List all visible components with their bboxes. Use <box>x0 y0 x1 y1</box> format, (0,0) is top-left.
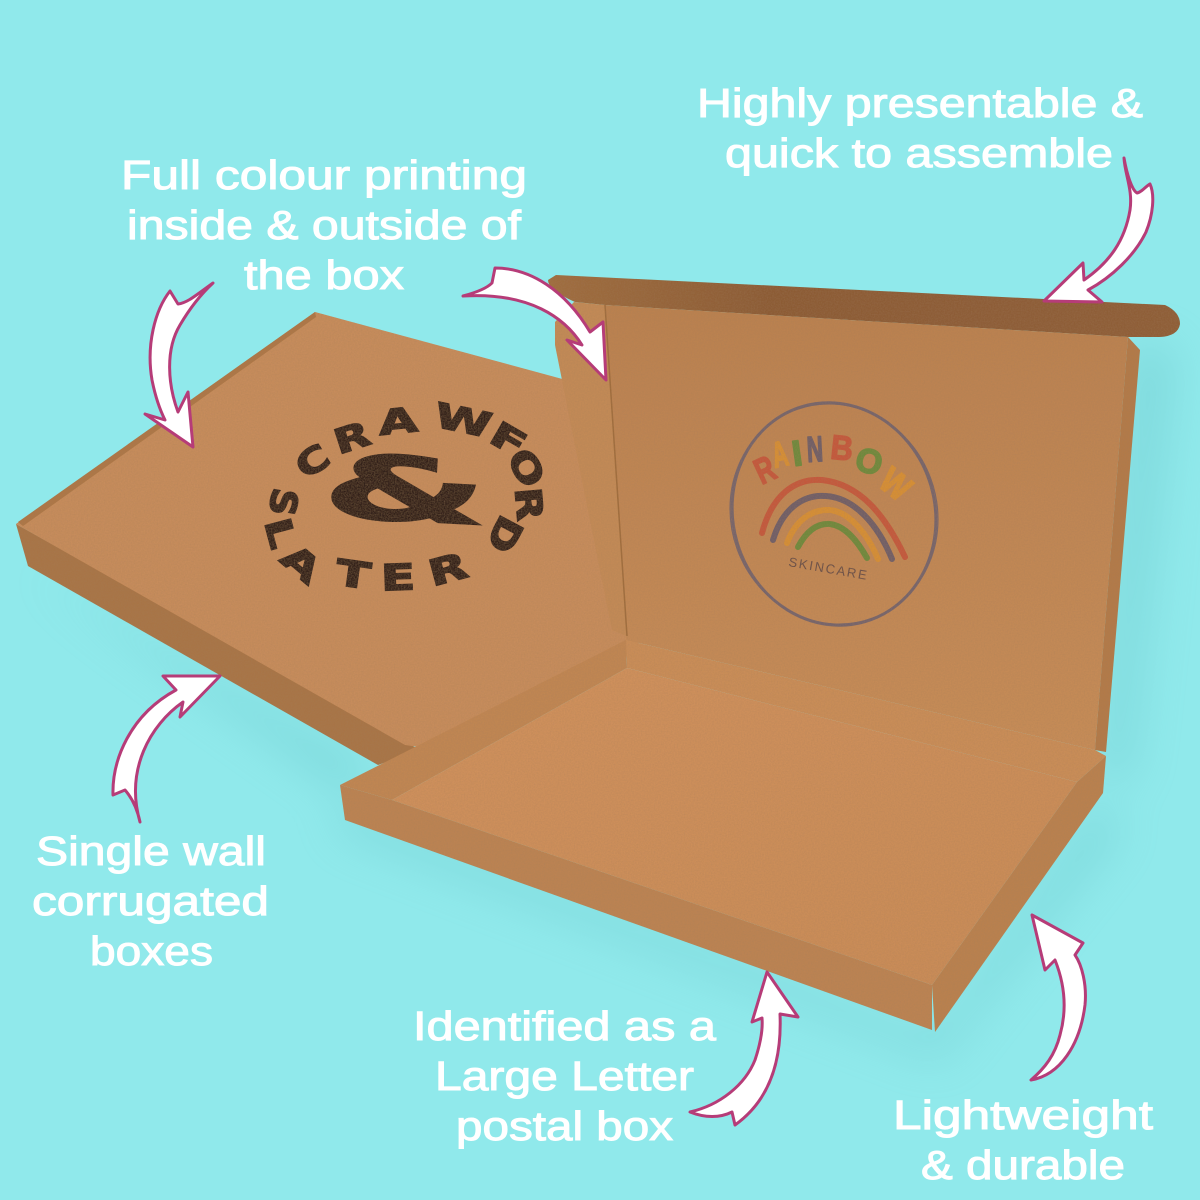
callout: lightweight <box>893 1092 1154 1188</box>
arrow: to lid interior <box>463 268 606 380</box>
arrow: to closed box top <box>145 283 213 447</box>
logo: Crawford & Slater: W <box>431 396 495 446</box>
logo: Rainbow Skincare: I <box>789 432 805 474</box>
callout: large letter: Identified as a <box>413 1003 716 1049</box>
lid top flap <box>548 275 1180 337</box>
logo: Crawford & Slater: A <box>273 535 330 593</box>
callout: highly presentable: Highly presentable & <box>697 80 1143 126</box>
callout: large letter: Large Letter <box>435 1053 694 1099</box>
rainbow arcs <box>762 480 905 559</box>
box edge crease <box>18 312 316 526</box>
lid inner panel <box>605 305 1128 750</box>
logo: Crawford & Slater <box>256 396 554 600</box>
arrow: to tray front <box>690 972 798 1125</box>
closed box with Crawford & Slater print <box>16 312 640 765</box>
box side wall <box>16 524 420 765</box>
logo: Rainbow Skincare: A <box>768 434 792 476</box>
callout: highly presentable: quick to assemble <box>725 130 1113 176</box>
logo ring <box>706 378 962 650</box>
tray left wall <box>340 640 627 800</box>
lid right flap <box>1095 337 1140 752</box>
box top face <box>16 312 640 750</box>
logo: Rainbow Skincare: B <box>829 428 855 468</box>
callout: single wall: corrugated <box>32 878 269 924</box>
callout: single wall <box>32 828 269 974</box>
soft shadows <box>30 340 1175 1060</box>
logo: Crawford & Slater: R <box>329 413 375 463</box>
lid left flap <box>555 302 627 636</box>
logo: Rainbow Skincare: O <box>851 440 887 484</box>
logo: Rainbow Skincare: N <box>806 430 824 470</box>
callout: lightweight: & durable <box>921 1142 1125 1188</box>
logo: Rainbow Skincare: W <box>871 460 919 510</box>
logo: Crawford & Slater: E <box>380 556 416 600</box>
tray back wall <box>626 640 1106 782</box>
logo: Crawford & Slater: R <box>506 486 550 522</box>
logo: Crawford & Slater: A <box>377 400 420 444</box>
skincare: SKINCARE <box>787 554 870 583</box>
arrow: to tray corner <box>1031 915 1085 1080</box>
tray right wall outer <box>932 756 1106 1032</box>
callout: full colour printing <box>121 152 527 298</box>
arrow: to closed box side <box>113 676 220 822</box>
logo: Crawford & Slater: D <box>477 508 531 560</box>
logo: Crawford & Slater: S <box>260 485 306 519</box>
logo: Crawford & Slater: O <box>498 441 554 495</box>
logo: Crawford & Slater: C <box>289 437 337 487</box>
logo: Crawford & Slater: L <box>256 513 304 553</box>
callout: large letter: postal box <box>456 1103 674 1149</box>
tray floor <box>392 668 1077 985</box>
callout: highly presentable <box>697 80 1143 176</box>
tray front wall <box>340 785 932 1030</box>
logo: Crawford & Slater: T <box>333 552 373 598</box>
logo: Crawford & Slater: F <box>483 414 533 466</box>
ampersand: & <box>320 434 490 546</box>
arrow: to lid flap <box>1044 158 1153 302</box>
callout: full colour printing: the box <box>244 252 405 298</box>
callout: single wall: Single wall <box>36 828 266 874</box>
callout: full colour printing: inside & outside of <box>127 202 522 248</box>
callout: lightweight: Lightweight <box>893 1092 1154 1138</box>
open box <box>340 275 1180 1032</box>
callout: large letter <box>413 1003 716 1149</box>
logo: Rainbow Skincare <box>699 374 969 654</box>
lid left crease <box>605 305 627 636</box>
logo: Crawford & Slater: R <box>424 545 472 595</box>
callout: full colour printing: Full colour printing <box>121 152 527 198</box>
rainbow lettering: R <box>748 448 782 492</box>
callout: single wall: boxes <box>90 928 213 974</box>
